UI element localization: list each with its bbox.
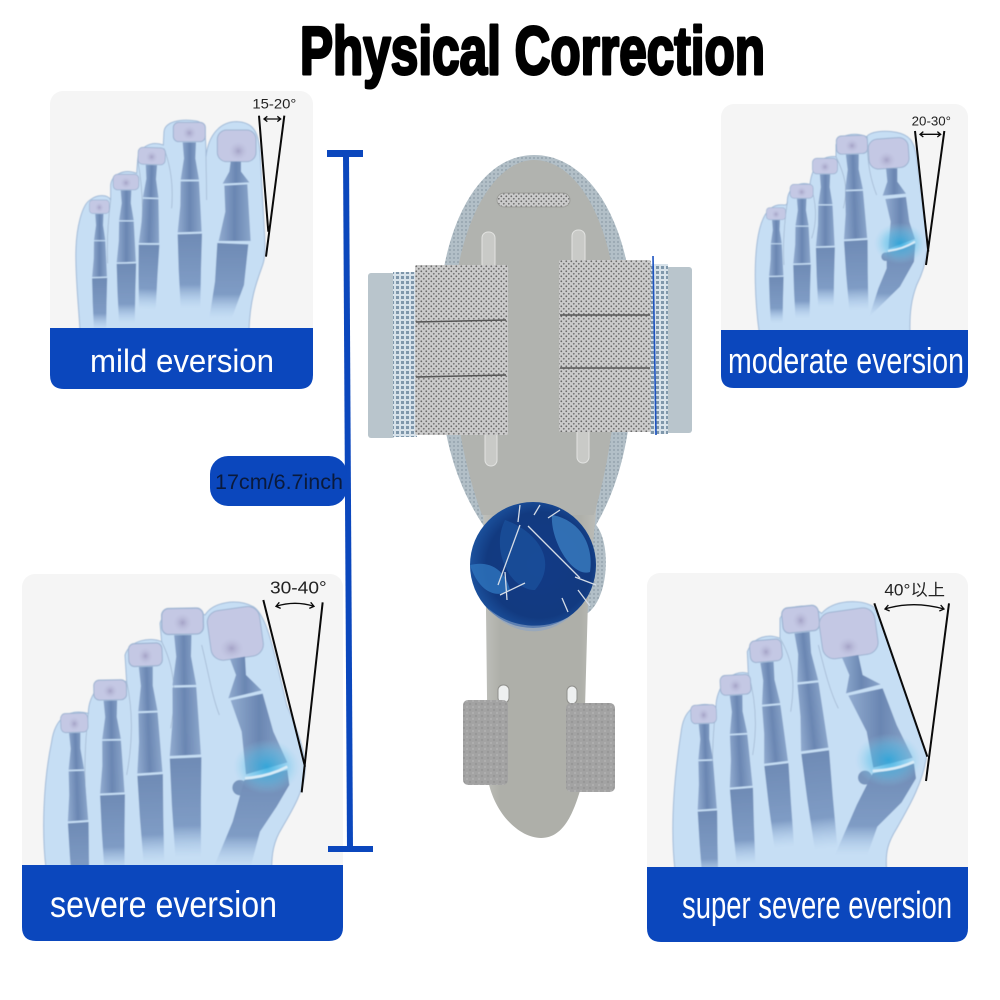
plate stem [483, 500, 597, 838]
label band [50, 328, 313, 389]
top slot [497, 193, 570, 207]
label text: mild eversion [90, 343, 274, 379]
angle marker 30-40°: 30-40° [270, 577, 327, 597]
dimension pill label: 17cm/6.7inch [215, 471, 343, 494]
foot illustration [673, 602, 927, 882]
rear strap arc [575, 520, 606, 615]
foot illustration [44, 602, 305, 896]
angle marker 15-20° [252, 95, 296, 257]
panel: moderate eversion [721, 104, 968, 388]
panel background [22, 574, 343, 884]
panel background [50, 91, 313, 351]
upper slots [482, 230, 589, 466]
lower straps [463, 700, 615, 792]
label text: severe eversion [50, 884, 277, 925]
product: bunion corrector splint [368, 155, 692, 838]
angle marker 20-30° [912, 114, 951, 265]
angle marker 40° and above [874, 581, 949, 781]
label band [647, 867, 968, 942]
blue seam line [653, 256, 656, 435]
label band [721, 330, 968, 388]
left strap [368, 265, 508, 438]
blue dial button [470, 502, 596, 631]
angle marker 15-20°: 15-20° [252, 95, 296, 111]
dimension line [327, 150, 373, 852]
dimension pill label [210, 456, 347, 506]
panel: mild eversion [50, 91, 313, 389]
angle marker 40° and above: 40°以上 [884, 581, 945, 600]
label band [22, 865, 343, 941]
foot illustration [755, 131, 927, 333]
panel background [721, 104, 968, 354]
panel: severe eversion [22, 574, 343, 941]
foot illustration [76, 120, 265, 330]
title: Physical Correction [300, 13, 765, 89]
right strap [559, 260, 692, 434]
panel: super severe eversion [647, 573, 968, 942]
angle marker 30-40° [263, 577, 327, 792]
fabric backing oval [438, 155, 634, 535]
plate oval [452, 160, 618, 515]
lower slots [498, 685, 577, 704]
angle marker 20-30°: 20-30° [912, 114, 951, 129]
panel background [647, 573, 968, 883]
